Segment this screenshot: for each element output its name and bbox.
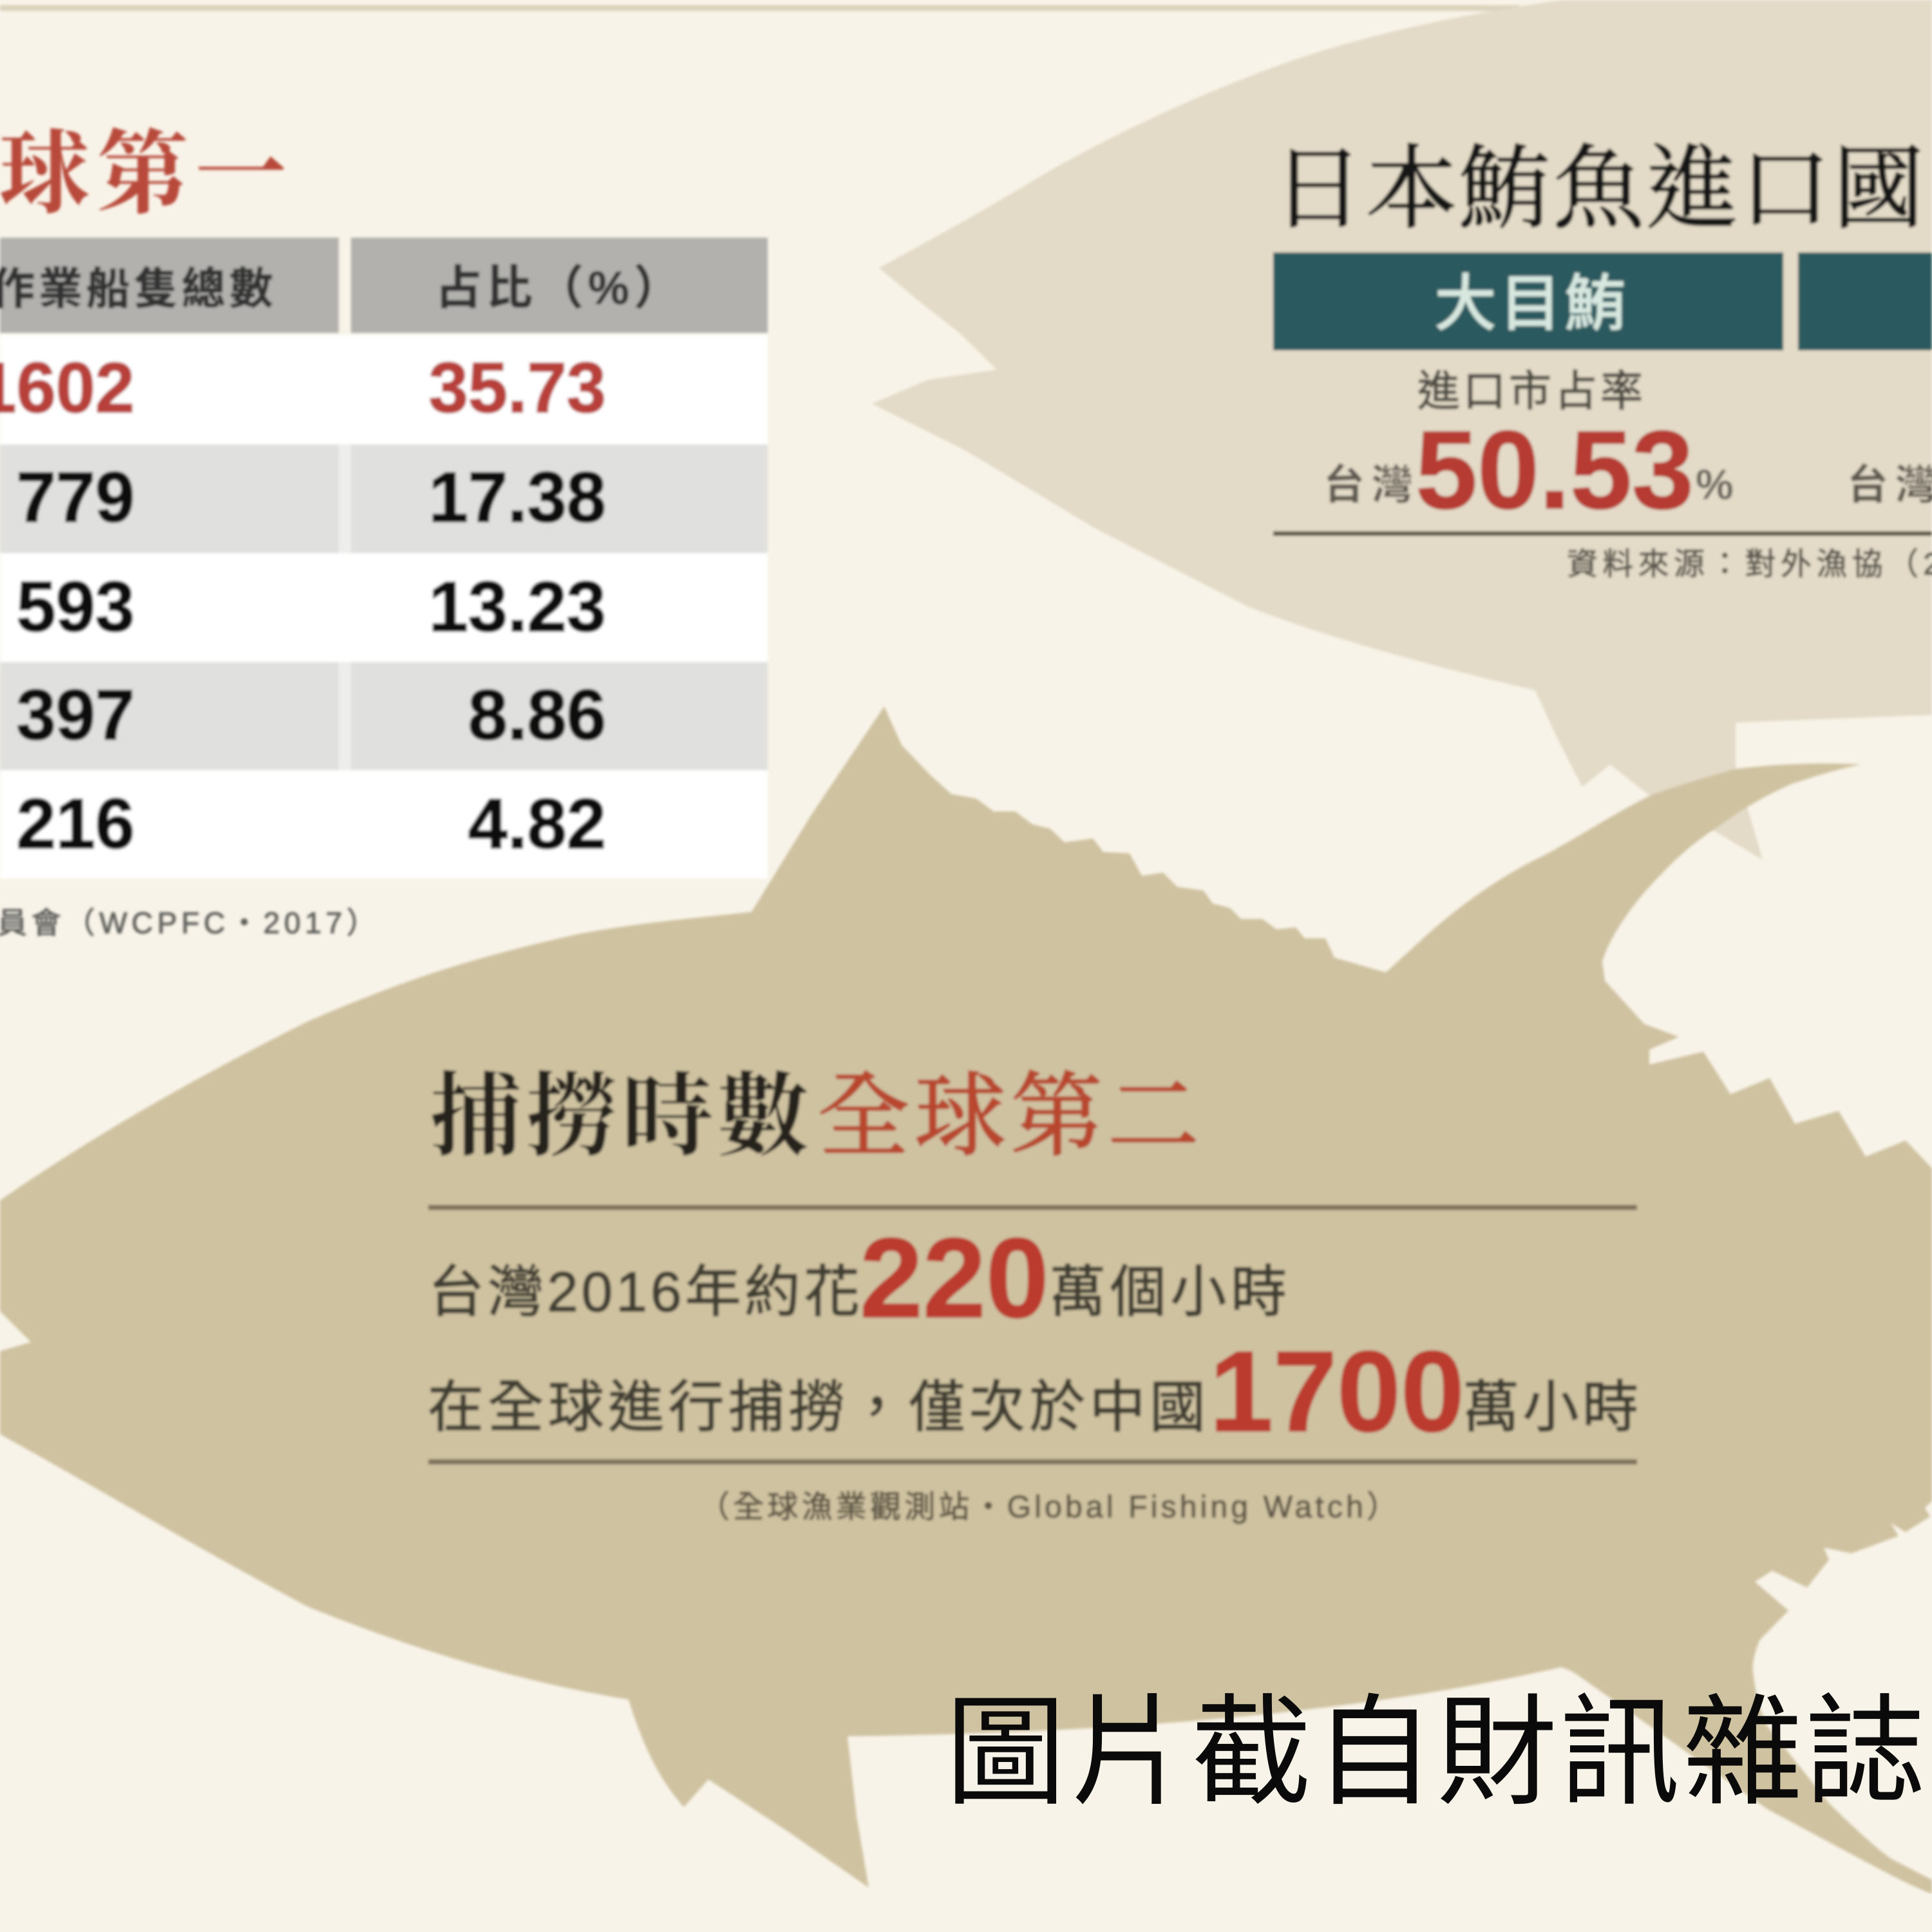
stat: Taiwan share: %	[1696, 460, 1734, 508]
table row 3: 593	[16, 567, 135, 647]
source note: import: 資料來源：對外漁協（2	[1567, 547, 1932, 582]
stat: Taiwan share: 50.53	[1416, 408, 1694, 532]
tab: bigeye tuna: 大目鮪	[1435, 270, 1626, 338]
tab: second species	[1798, 252, 1932, 350]
table row 5: 4.82	[468, 784, 606, 864]
heading: fishing hours	[430, 1066, 1199, 1168]
table source note: 員會（WCPFC・2017）	[0, 906, 376, 940]
panel: Japan tuna import	[1273, 138, 1932, 582]
watermark caption: 圖片截自財訊雜誌	[945, 1685, 1926, 1820]
stat: Taiwan share	[1323, 408, 1734, 532]
text line: Taiwan 2016 hours	[428, 1215, 1287, 1341]
text line: second to China: 萬小時	[1463, 1376, 1638, 1439]
table row 2	[0, 444, 768, 553]
table row 4: 397	[16, 676, 135, 755]
table row 5: 216	[16, 784, 135, 864]
source note: fishing watch: （全球漁業觀測站・Global Fishing Watch）	[699, 1490, 1397, 1524]
text line: second to China: 在全球進行捕撈，僅次於中國	[428, 1376, 1206, 1439]
label: import market share: 進口市占率	[1417, 367, 1643, 415]
illustration: upper light tuna silhouette	[872, 0, 1932, 860]
panel: fishing hours	[428, 1066, 1638, 1524]
heading: fishing hours: 全球第二	[818, 1066, 1199, 1168]
text line: Taiwan 2016 hours: 萬個小時	[1050, 1261, 1287, 1323]
heading: Japan import: 日本鮪魚進口國	[1273, 138, 1924, 240]
table header row	[0, 238, 768, 333]
table row 4: 8.86	[468, 676, 606, 755]
table row 5	[0, 770, 768, 878]
table header row: 占比（%）	[435, 263, 680, 314]
table row 4	[0, 662, 768, 770]
text line: Taiwan 2016 hours: 220	[860, 1215, 1049, 1341]
table row 1: highlighted	[0, 335, 768, 444]
table row 3: 13.23	[429, 567, 606, 647]
table row 2: 779	[16, 458, 135, 537]
text line: second to China: 1700	[1209, 1327, 1464, 1455]
illustration: lower dark tuna silhouette	[0, 706, 1932, 1894]
tab: bigeye tuna	[1273, 252, 1783, 350]
heading: fishing hours: 捕撈時數	[430, 1066, 809, 1168]
table row 1: highlighted: 35.73	[429, 348, 606, 428]
table row 3	[0, 553, 768, 662]
stat: Taiwan share: 台灣	[1323, 462, 1413, 508]
panel: vessel count table	[0, 238, 768, 878]
text line: second to China	[428, 1327, 1638, 1455]
text line: Taiwan 2016 hours: 台灣2016年約花	[428, 1261, 860, 1323]
heading: global first: 球第一	[0, 124, 287, 225]
table row 2: 17.38	[429, 458, 606, 537]
